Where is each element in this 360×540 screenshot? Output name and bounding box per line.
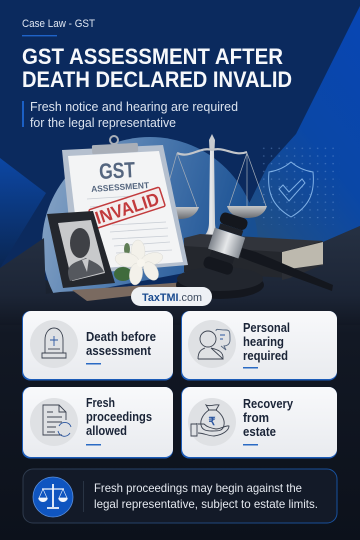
icon: scales in blue circle	[33, 477, 73, 517]
icon: shield with check	[269, 162, 313, 217]
callout panel: legal representative, subject to estate limits.	[94, 497, 318, 511]
icon: money bag on hand: ₹	[208, 416, 216, 428]
icon: money bag on hand	[188, 398, 236, 446]
icon: gravestone	[30, 320, 78, 368]
card: recovery from estate: Recovery	[243, 397, 293, 411]
card: fresh proceedings allowed: Fresh	[86, 396, 115, 410]
callout panel	[23, 469, 337, 523]
icon: person with speech bubble	[188, 320, 236, 368]
logo pill	[131, 287, 212, 306]
icon: clipboard with stamp: INVALID	[93, 189, 162, 228]
eyebrow underline	[22, 35, 57, 36]
card: fresh proceedings allowed	[22, 387, 173, 458]
icon: document with refresh	[30, 398, 78, 446]
icon: gavel	[176, 211, 333, 299]
icon: clipboard with stamp	[62, 136, 188, 272]
card: personal hearing required: Personal	[243, 321, 290, 335]
icon: book	[184, 234, 325, 280]
subtitle	[22, 99, 238, 130]
icon: clipboard with stamp: GST	[98, 157, 136, 184]
title	[22, 44, 292, 92]
desk tray	[72, 280, 225, 301]
callout panel: Fresh proceedings may begin against the	[94, 481, 302, 495]
subtitle: for the legal representative	[30, 115, 176, 130]
eyebrow label: Case Law - GST	[22, 18, 95, 30]
card: personal hearing required	[181, 311, 337, 380]
icon: portrait frame	[47, 211, 115, 288]
card: fresh proceedings allowed: proceedings	[86, 410, 152, 424]
logo pill: TaxTMI.com	[142, 292, 202, 304]
card: personal hearing required: hearing	[243, 335, 284, 349]
card: recovery from estate: estate	[243, 425, 276, 439]
card: recovery from estate: from	[243, 411, 269, 425]
card: personal hearing required: required	[243, 349, 288, 363]
title: GST ASSESSMENT AFTER	[22, 44, 283, 69]
card: death before assessment: Death before	[86, 330, 156, 344]
card: fresh proceedings allowed: allowed	[86, 424, 127, 438]
subtitle: Fresh notice and hearing are required	[30, 99, 238, 114]
title: DEATH DECLARED INVALID	[22, 67, 292, 92]
illustration: legal scene	[47, 134, 333, 301]
icon: clipboard with stamp: ASSESSMENT	[91, 180, 150, 194]
icon: balance scale	[160, 134, 267, 241]
icon: white lily	[114, 240, 164, 286]
card: recovery from estate	[181, 387, 337, 458]
card: death before assessment	[22, 311, 173, 380]
card: death before assessment: assessment	[86, 344, 152, 358]
